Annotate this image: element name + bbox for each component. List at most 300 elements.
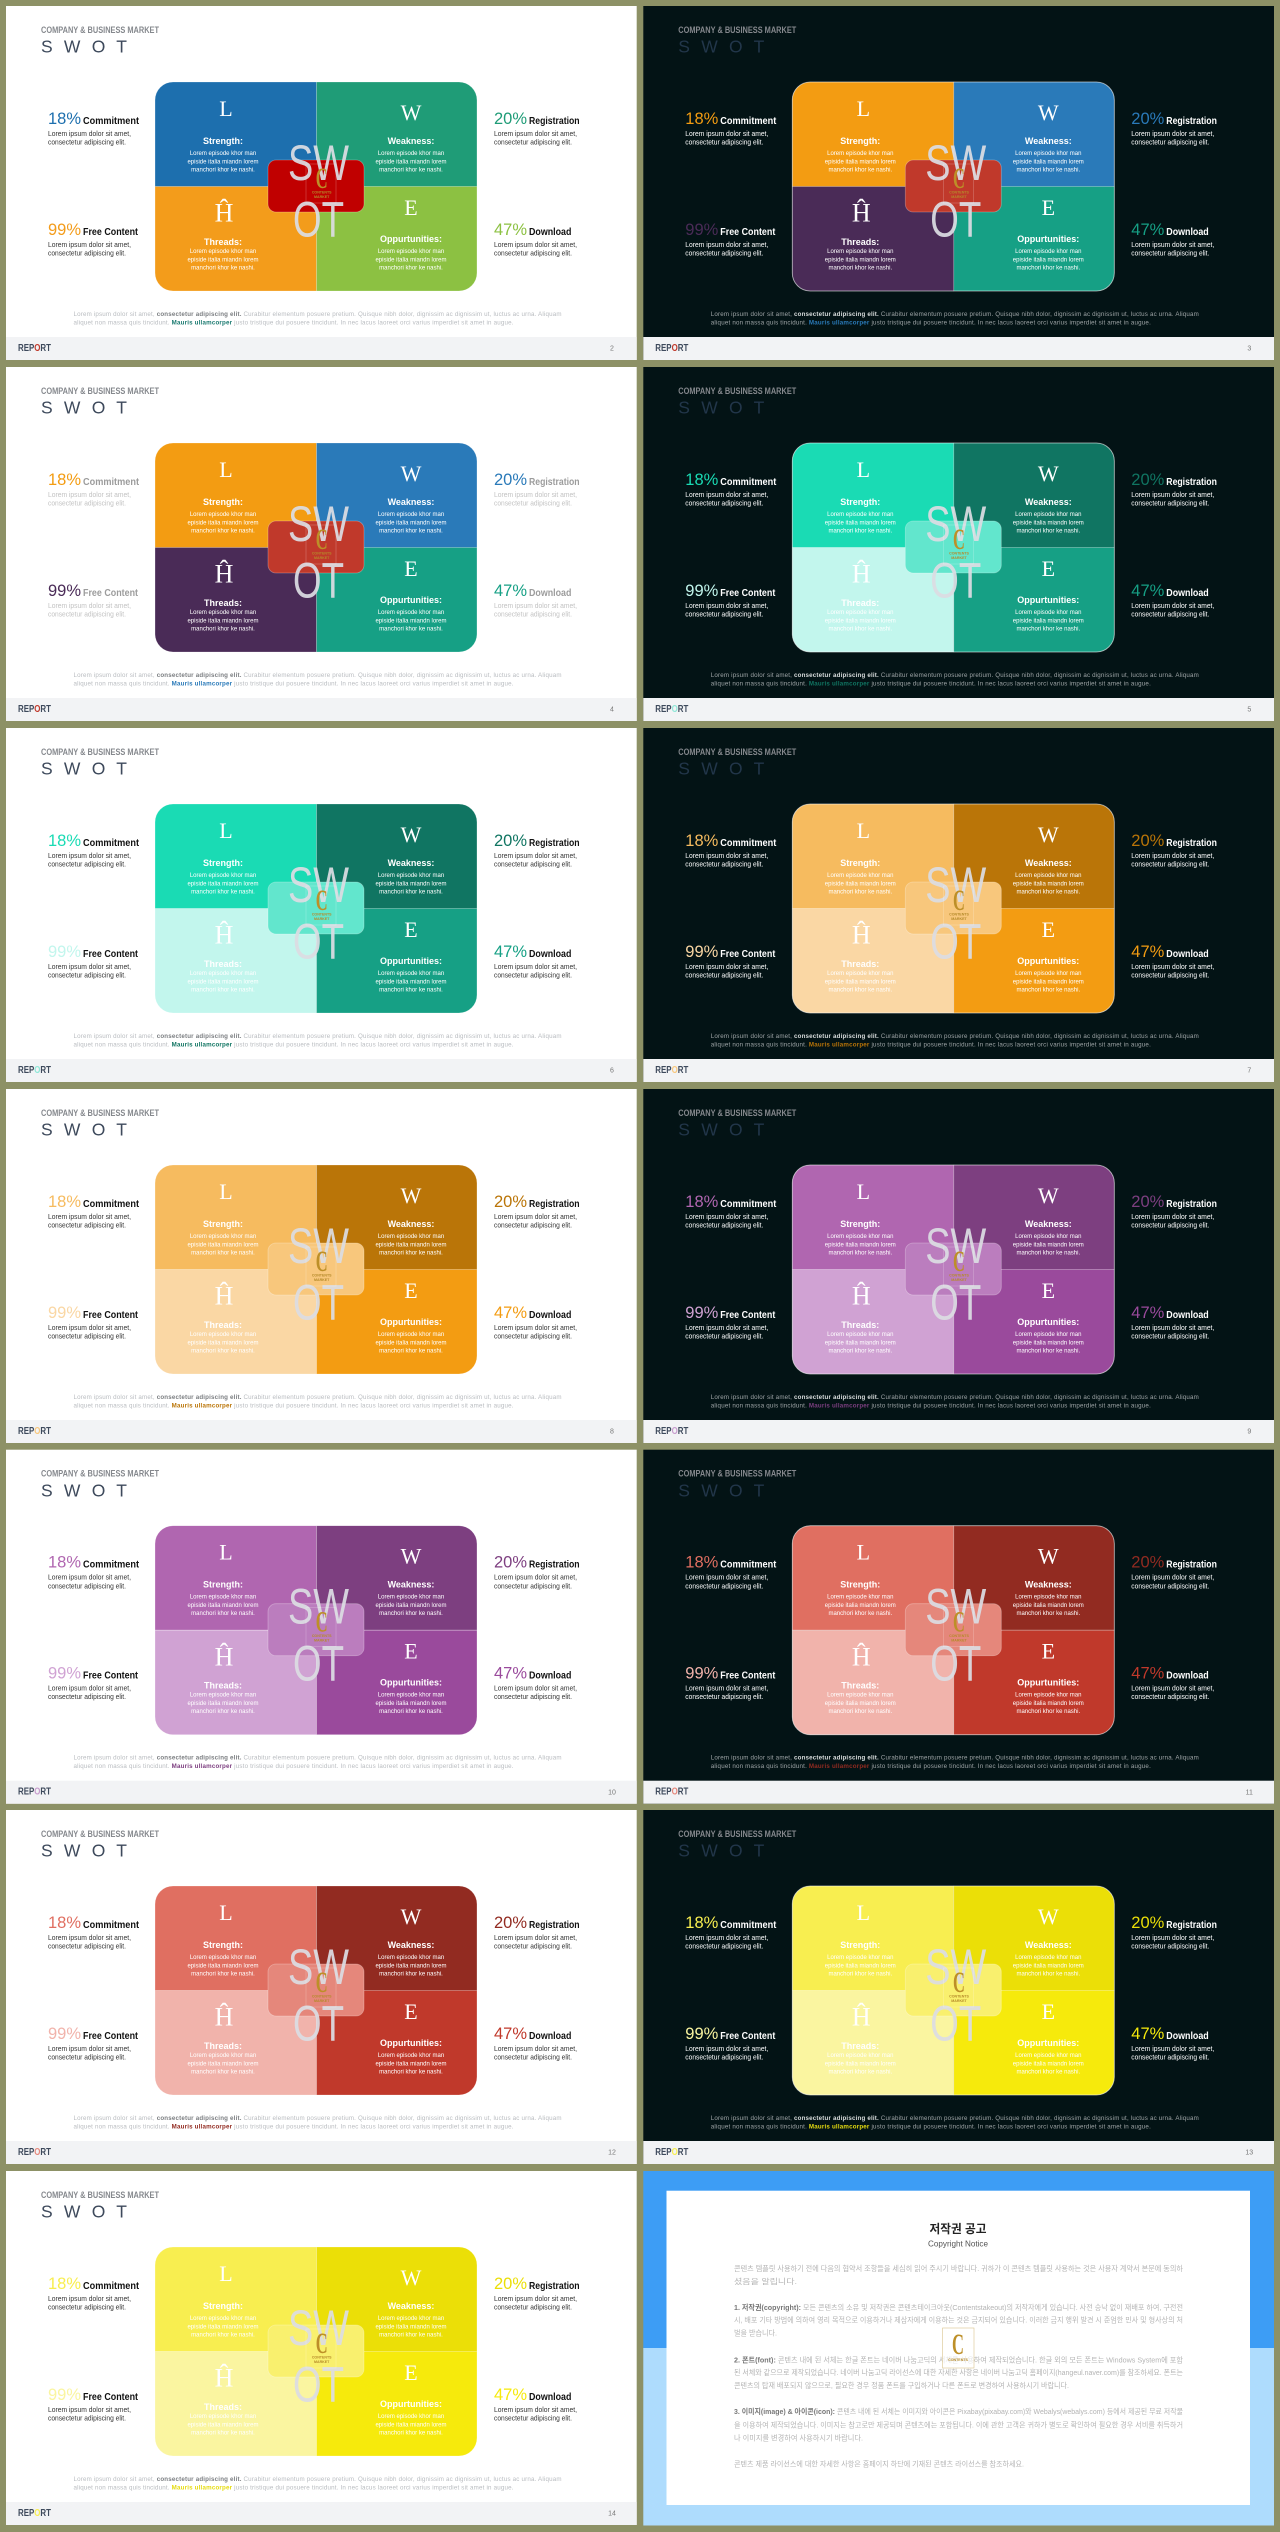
SWOT matrix: CONTENTS (312, 2356, 332, 2360)
slide 14: light SWOT yellow (6, 2171, 637, 2525)
SWOT matrix: manchori khor ke nashi. (191, 167, 255, 173)
stat: 20% Registration: consectetur adipiscing elit. (1131, 860, 1209, 869)
stat: 99% Free Content: Lorem ipsum dolor sit amet, (685, 962, 768, 971)
stat: 47% Download: Lorem ipsum dolor sit amet, (1131, 601, 1214, 610)
SWOT matrix: C (316, 1966, 328, 1999)
SWOT matrix: episide italia miandn lorem (825, 257, 896, 263)
stat: 47% Download: Download (529, 588, 571, 599)
stat: 20% Registration: 20% (494, 1914, 527, 1932)
stat: 99% Free Content: Lorem ipsum dolor sit amet, (48, 240, 131, 249)
stat: 18% Commitment (685, 471, 777, 508)
heading: COMPANY & BUSINESS MARKET (41, 2190, 159, 2200)
stat: 99% Free Content: Lorem ipsum dolor sit amet, (685, 1323, 768, 1332)
heading: S W O T (41, 398, 130, 418)
heading: S W O T (41, 1480, 130, 1500)
stat: 18% Commitment: Commitment (720, 1560, 777, 1571)
SWOT matrix: SW (288, 1218, 350, 1274)
stat: 20% Registration (1131, 471, 1217, 508)
stat: 47% Download: 47% (494, 1665, 527, 1683)
SWOT matrix: Threads: (204, 2041, 242, 2051)
SWOT matrix (155, 804, 477, 1013)
stat: 20% Registration: consectetur adipiscing elit. (494, 1942, 572, 1951)
footer bar: 10 (608, 1789, 616, 1796)
SWOT matrix: Lorem episode khor man (827, 1693, 893, 1699)
SWOT matrix: manchori khor ke nashi. (1016, 1250, 1080, 1256)
slide 8: light SWOT amber (6, 1089, 637, 1443)
stat: 99% Free Content: Free Content (720, 1310, 776, 1321)
SWOT matrix: C (316, 2327, 328, 2360)
stat: 99% Free Content (48, 2386, 139, 2422)
SWOT matrix: Lorem episode khor man (190, 2414, 256, 2420)
SWOT matrix: OT (930, 553, 981, 609)
stat: 20% Registration: consectetur adipiscing elit. (1131, 499, 1209, 508)
notice section 1: copyright: 벌을 받습니다. (734, 2328, 777, 2338)
stat: 99% Free Content: Free Content (83, 1671, 139, 1682)
SWOT matrix: episide italia miandn lorem (825, 159, 896, 165)
stat: 20% Registration (494, 110, 580, 147)
SWOT matrix: Ĥ (852, 1282, 871, 1311)
heading: S W O T (41, 1841, 130, 1861)
SWOT matrix: manchori khor ke nashi. (1016, 1611, 1080, 1617)
heading: COMPANY & BUSINESS MARKET (41, 1829, 159, 1839)
stat: 20% Registration (1131, 1193, 1217, 1230)
stat: 18% Commitment: 18% (48, 1193, 81, 1211)
SWOT matrix: E (1042, 917, 1055, 942)
SWOT matrix: episide italia miandn lorem (825, 520, 896, 526)
SWOT matrix (155, 1526, 477, 1735)
notice section 1: copyright (734, 2302, 1183, 2338)
SWOT matrix: CONTENTS (949, 1634, 969, 1638)
stat: 20% Registration: 20% (1131, 832, 1165, 850)
stat: 18% Commitment: 18% (48, 1914, 81, 1932)
stat: 99% Free Content: Lorem ipsum dolor sit amet, (685, 240, 768, 249)
stat: 18% Commitment (685, 1554, 777, 1590)
heading: S W O T (41, 37, 130, 57)
SWOT matrix: Oppurtunities: (1017, 1678, 1079, 1688)
SWOT matrix: episide italia miandn lorem (825, 1603, 896, 1609)
SWOT matrix: Weakness: (388, 1940, 434, 1950)
stat: 99% Free Content: consectetur adipiscing elit. (685, 1692, 763, 1701)
SWOT matrix: Oppurtunities: (380, 2399, 442, 2409)
SWOT matrix: Ĥ (852, 1642, 871, 1671)
SWOT matrix: episide italia miandn lorem (187, 979, 259, 985)
SWOT matrix: manchori khor ke nashi. (828, 626, 892, 632)
SWOT matrix: episide italia miandn lorem (825, 1701, 896, 1707)
SWOT matrix: episide italia miandn lorem (375, 881, 447, 887)
stat: 18% Commitment: consectetur adipiscing elit. (48, 138, 126, 147)
slide 4: light SWOT orange blue purple teal, muted labels (6, 367, 637, 721)
footer bar: REPORT (18, 1426, 51, 1437)
SWOT matrix: manchori khor ke nashi. (191, 987, 255, 993)
stat: 18% Commitment: 18% (685, 832, 719, 850)
SWOT matrix: Lorem episode khor man (1015, 971, 1081, 977)
stat: 99% Free Content: consectetur adipiscing elit. (685, 970, 763, 980)
SWOT matrix: W (401, 1183, 422, 1208)
SWOT matrix: manchori khor ke nashi. (379, 1348, 443, 1354)
stat: 47% Download (1131, 1665, 1214, 1701)
SWOT matrix: L (219, 1900, 233, 1925)
SWOT matrix: Lorem episode khor man (190, 1693, 256, 1699)
stat: 47% Download: consectetur adipiscing elit. (494, 1332, 572, 1340)
stat: 18% Commitment: consectetur adipiscing elit. (48, 860, 126, 869)
SWOT matrix: manchori khor ke nashi. (1016, 626, 1080, 632)
footnote: aliquet non massa quis tincidunt. Mauris ullamcorper justo tristique dui posuere tincidunt. In nec lacus laoreet orci varius imperdiet sit amet in augue. (711, 1763, 1151, 1770)
SWOT matrix: Lorem episode khor man (827, 249, 893, 255)
footer bar (6, 1420, 637, 1443)
SWOT matrix: manchori khor ke nashi. (1016, 1348, 1080, 1354)
SWOT matrix: SW (925, 135, 987, 191)
footer bar: 12 (608, 2150, 616, 2157)
SWOT matrix: W (1038, 100, 1059, 125)
footer bar: REPORT (655, 1426, 688, 1437)
stat: 47% Download: Download (1166, 1671, 1209, 1682)
stat: 47% Download (1131, 2025, 1214, 2062)
stat: 20% Registration: 20% (494, 1193, 527, 1211)
stat: 20% Registration (1131, 832, 1217, 869)
footer bar: REPORT (655, 2147, 688, 2158)
SWOT matrix: Ĥ (215, 1282, 234, 1311)
SWOT matrix: Oppurtunities: (380, 595, 442, 605)
SWOT matrix: C (953, 1606, 965, 1639)
stat: 47% Download (1131, 582, 1214, 618)
stat: 20% Registration (494, 1554, 580, 1590)
footer bar (6, 1781, 637, 1804)
footer bar (643, 1420, 1274, 1443)
stat: 47% Download: 47% (494, 2025, 527, 2043)
stat: 20% Registration (1131, 1554, 1217, 1590)
stat: 47% Download: Download (529, 2392, 571, 2403)
stat: 99% Free Content: Free Content (720, 1671, 776, 1682)
notice section 1: copyright: 1. 저작권(copyright): 모든 콘텐츠의 소유 및 저작권은 콘텐츠테이크아웃(Contentstakeout)의 저작자에게 있습니다. 사전 승낙 없이 재배포 하여, 구전전 (734, 2302, 1183, 2312)
stat: 99% Free Content: Lorem ipsum dolor sit amet, (48, 2405, 131, 2414)
stat: 99% Free Content: consectetur adipiscing elit. (685, 1332, 763, 1340)
SWOT matrix: Weakness: (1025, 497, 1072, 507)
SWOT matrix: manchori khor ke nashi. (828, 167, 892, 173)
stat: 47% Download: consectetur adipiscing elit. (1131, 248, 1209, 258)
heading: S W O T (678, 398, 767, 418)
SWOT matrix: manchori khor ke nashi. (379, 1611, 443, 1617)
SWOT matrix: manchori khor ke nashi. (191, 2069, 255, 2075)
stat: 47% Download: Download (529, 1310, 571, 1321)
stat: 47% Download: consectetur adipiscing elit. (494, 2414, 572, 2422)
footer bar: REPORT (18, 704, 51, 715)
stat: 18% Commitment: consectetur adipiscing elit. (685, 1581, 763, 1590)
stat: 18% Commitment: consectetur adipiscing elit. (48, 499, 126, 508)
stat: 18% Commitment: 18% (685, 471, 719, 489)
stat: 99% Free Content: 99% (48, 1304, 81, 1322)
stat: 47% Download: consectetur adipiscing elit. (494, 970, 572, 980)
SWOT matrix: Oppurtunities: (380, 2038, 442, 2048)
slide 13: dark SWOT yellow (643, 1810, 1274, 2164)
notice section 3: image and icon: 3. 이미지(image) & 아이콘(icon): 콘텐츠 내에 된 서체는 이미지와 아이콘은 Pixabay(pixabay.com)와 Webalys(webalys.com) 등에서 제공된 무료 저작물 (734, 2406, 1183, 2416)
SWOT matrix: Lorem episode khor man (827, 512, 893, 518)
SWOT matrix: Lorem episode khor man (1015, 1595, 1081, 1601)
footnote: Lorem ipsum dolor sit amet, consectetur adipiscing elit. Curabitur elementum posuere pretium. Quisque nibh dolor, dignissim ac dignissim ut, luctus ac urna. Aliquam (711, 1033, 1199, 1040)
stat: 47% Download: Download (1166, 588, 1209, 599)
SWOT matrix: Threads: (841, 237, 879, 247)
SWOT matrix: manchori khor ke nashi. (828, 1611, 892, 1617)
stat: 99% Free Content: Lorem ipsum dolor sit amet, (48, 962, 131, 971)
footnote: aliquet non massa quis tincidunt. Mauris ullamcorper justo tristique dui posuere tincidunt. In nec lacus laoreet orci varius imperdiet sit amet in augue. (74, 2123, 514, 2130)
SWOT matrix: SW (288, 135, 350, 191)
heading: COMPANY & BUSINESS MARKET (678, 25, 797, 35)
stat: 47% Download (494, 2386, 577, 2422)
SWOT matrix: Oppurtunities: (380, 956, 442, 966)
stat: 47% Download: 47% (494, 1304, 527, 1322)
stat: 47% Download: Lorem ipsum dolor sit amet, (1131, 1323, 1214, 1332)
heading: COMPANY & BUSINESS MARKET (678, 747, 797, 757)
stat: 18% Commitment: 18% (48, 2275, 81, 2293)
SWOT matrix: SW (925, 496, 987, 552)
stat: 47% Download: Lorem ipsum dolor sit amet, (1131, 962, 1214, 971)
SWOT matrix: OT (930, 1996, 981, 2052)
SWOT matrix: episide italia miandn lorem (187, 1603, 259, 1609)
notice subtitle: Copyright Notice (928, 2239, 988, 2249)
SWOT matrix: manchori khor ke nashi. (379, 1971, 443, 1977)
stat: 18% Commitment: Commitment (83, 116, 140, 127)
stat: 99% Free Content: consectetur adipiscing elit. (685, 248, 763, 258)
stat: 18% Commitment: 18% (685, 1554, 719, 1572)
SWOT matrix: Threads: (841, 598, 879, 608)
SWOT matrix: Lorem episode khor man (378, 1332, 444, 1338)
SWOT matrix: Lorem episode khor man (827, 610, 893, 616)
SWOT matrix: Threads: (841, 2041, 879, 2051)
SWOT matrix: Lorem episode khor man (190, 1955, 256, 1961)
SWOT matrix: manchori khor ke nashi. (379, 528, 443, 534)
SWOT matrix: E (404, 1999, 418, 2024)
SWOT matrix: W (401, 1904, 422, 1929)
stat: 47% Download: 47% (1131, 221, 1165, 239)
SWOT matrix: Lorem episode khor man (190, 1332, 256, 1338)
SWOT matrix: L (219, 96, 233, 121)
SWOT matrix: Lorem episode khor man (378, 873, 444, 879)
SWOT matrix: OT (930, 192, 981, 248)
stat: 47% Download: Lorem ipsum dolor sit amet, (494, 1684, 577, 1693)
SWOT matrix: Strength: (203, 136, 243, 146)
stat: 47% Download (1131, 943, 1214, 980)
stat: 99% Free Content: 99% (685, 221, 719, 239)
stat: 18% Commitment: Commitment (83, 1920, 140, 1931)
SWOT matrix: episide italia miandn lorem (1013, 2061, 1084, 2067)
footnote: aliquet non massa quis tincidunt. Mauris ullamcorper justo tristique dui posuere tincidunt. In nec lacus laoreet orci varius imperdiet sit amet in augue. (74, 1402, 514, 1409)
SWOT matrix: episide italia miandn lorem (187, 159, 259, 165)
SWOT matrix: Strength: (840, 1940, 880, 1950)
stat: 99% Free Content (685, 943, 776, 980)
SWOT matrix: episide italia miandn lorem (825, 881, 896, 887)
stat: 18% Commitment: 18% (48, 832, 81, 850)
stat: 99% Free Content: 99% (48, 2025, 81, 2043)
stat: 99% Free Content: consectetur adipiscing elit. (48, 2052, 126, 2062)
SWOT matrix: E (1042, 1278, 1055, 1303)
SWOT matrix: Weakness: (388, 1580, 434, 1590)
footer bar (6, 698, 637, 721)
stat: 99% Free Content (48, 2025, 139, 2062)
stat: 47% Download: consectetur adipiscing elit. (1131, 970, 1209, 980)
SWOT matrix: episide italia miandn lorem (375, 520, 447, 526)
stat: 99% Free Content: Lorem ipsum dolor sit amet, (685, 1684, 768, 1693)
SWOT matrix: Weakness: (388, 858, 434, 868)
SWOT matrix: Ĥ (852, 2003, 871, 2032)
stat: 18% Commitment: Commitment (83, 1560, 140, 1571)
heading (678, 1108, 797, 1140)
SWOT matrix: episide italia miandn lorem (187, 257, 259, 263)
stat: 18% Commitment: Commitment (720, 838, 777, 849)
stat: 18% Commitment: Commitment (720, 477, 777, 488)
SWOT matrix: Oppurtunities: (1017, 1317, 1079, 1327)
stat: 20% Registration: Lorem ipsum dolor sit amet, (494, 129, 577, 138)
stat: 47% Download (494, 2025, 577, 2062)
footer bar: 5 (1247, 707, 1251, 714)
heading (41, 2190, 159, 2222)
stat: 20% Registration: 20% (1131, 110, 1165, 128)
SWOT matrix: episide italia miandn lorem (1013, 520, 1084, 526)
SWOT matrix: Lorem episode khor man (827, 1595, 893, 1601)
SWOT matrix: MARKET (314, 1639, 330, 1643)
stat: 99% Free Content (685, 1665, 776, 1701)
SWOT matrix: manchori khor ke nashi. (379, 987, 443, 993)
SWOT matrix: episide italia miandn lorem (1013, 159, 1084, 165)
SWOT matrix: episide italia miandn lorem (825, 2061, 896, 2067)
SWOT matrix: manchori khor ke nashi. (828, 265, 892, 271)
SWOT matrix: episide italia miandn lorem (187, 1242, 259, 1248)
stat: 99% Free Content: Free Content (720, 949, 776, 960)
footnote: Lorem ipsum dolor sit amet, consectetur adipiscing elit. Curabitur elementum posuere pretium. Quisque nibh dolor, dignissim ac dignissim ut, luctus ac urna. Aliquam (711, 1755, 1199, 1762)
slide 7: dark SWOT amber (643, 728, 1274, 1082)
footer bar (643, 2141, 1274, 2164)
stat: 20% Registration: 20% (494, 832, 527, 850)
SWOT matrix: manchori khor ke nashi. (1016, 167, 1080, 173)
footer bar: REPORT (18, 2508, 51, 2519)
SWOT matrix: W (1038, 1544, 1059, 1569)
SWOT matrix: L (219, 818, 233, 843)
SWOT matrix: Lorem episode khor man (1015, 873, 1081, 879)
SWOT matrix: Weakness: (388, 497, 434, 507)
SWOT matrix (155, 2247, 477, 2456)
footnote: Lorem ipsum dolor sit amet, consectetur adipiscing elit. Curabitur elementum posuere pretium. Quisque nibh dolor, dignissim ac dignissim ut, luctus ac urna. Aliquam (74, 311, 561, 318)
footnote: Lorem ipsum dolor sit amet, consectetur adipiscing elit. Curabitur elementum posuere pretium. Quisque nibh dolor, dignissim ac dignissim ut, luctus ac urna. Aliquam (711, 311, 1199, 318)
slide 11: dark SWOT red (643, 1450, 1274, 1804)
SWOT matrix: manchori khor ke nashi. (1016, 265, 1080, 271)
SWOT matrix (792, 1165, 1114, 1374)
SWOT matrix: C (316, 162, 328, 195)
notice section 3: image and icon: 나 이미지를 변경하여 사용하시기 바랍니다. (734, 2432, 863, 2442)
stat: 99% Free Content (48, 1665, 139, 1701)
stat: 99% Free Content: 99% (685, 2025, 719, 2043)
SWOT matrix: Threads: (204, 2402, 242, 2412)
footnote: aliquet non massa quis tincidunt. Mauris ullamcorper justo tristique dui posuere tincidunt. In nec lacus laoreet orci varius imperdiet sit amet in augue. (74, 2484, 514, 2491)
stat: 18% Commitment: Lorem ipsum dolor sit amet, (685, 490, 768, 499)
SWOT matrix: Oppurtunities: (380, 1317, 442, 1327)
stat: 20% Registration: consectetur adipiscing elit. (494, 1581, 572, 1590)
stat: 18% Commitment: 18% (48, 1554, 81, 1572)
SWOT matrix: L (857, 1900, 870, 1925)
SWOT matrix: Threads: (204, 237, 242, 247)
stat: 47% Download: Download (529, 2031, 571, 2042)
SWOT matrix: Weakness: (388, 136, 434, 146)
SWOT matrix: Threads: (204, 1320, 242, 1330)
SWOT matrix: Lorem episode khor man (190, 1595, 256, 1601)
notice title: 저작권 공고 (930, 2221, 986, 2236)
stat: 47% Download: 47% (494, 2386, 527, 2404)
SWOT matrix (155, 1886, 477, 2095)
stat: 99% Free Content (685, 2025, 776, 2062)
stat: 20% Registration: consectetur adipiscing elit. (494, 499, 572, 508)
slide 12: light SWOT red (6, 1810, 637, 2164)
notice intro: 콘텐츠 템플릿 사용하기 전에 다음의 협약서 조항들을 세심히 읽어 주시기 바랍니다. 귀하가 이 콘텐츠 템플릿 사용하는 것은 사용자 계약서 본문에 동의하 (734, 2263, 1183, 2273)
heading: S W O T (678, 1841, 767, 1861)
SWOT matrix: C (316, 1606, 328, 1639)
notice section 3: image and icon: 을 이용하여 제작되었습니다. 이미지는 참고로만 제공되며 콘텐츠에는 포함됩니다. 이에 관한 고객은 귀하가 별도로 확인하여 필요한 경우 서비를 취득하거 (734, 2419, 1183, 2429)
stat: 18% Commitment: Commitment (720, 116, 777, 127)
SWOT matrix: MARKET (314, 2360, 330, 2364)
heading (678, 386, 797, 418)
stat: 99% Free Content: 99% (48, 582, 81, 600)
stat: 47% Download: consectetur adipiscing elit. (494, 2052, 572, 2062)
SWOT matrix: episide italia miandn lorem (375, 2061, 447, 2067)
stat: 47% Download: 47% (494, 221, 527, 239)
SWOT matrix: L (219, 457, 233, 482)
footer bar: 9 (1247, 1429, 1251, 1436)
stat: 99% Free Content: Lorem ipsum dolor sit amet, (48, 601, 131, 610)
stat: 20% Registration (494, 1193, 580, 1230)
SWOT matrix: CONTENTS (949, 552, 969, 556)
stat: 18% Commitment: Lorem ipsum dolor sit amet, (48, 490, 131, 499)
stat: 99% Free Content: 99% (685, 1665, 719, 1683)
SWOT matrix: L (219, 2261, 233, 2286)
stat: 20% Registration: Lorem ipsum dolor sit amet, (1131, 1573, 1214, 1582)
stat: 99% Free Content: Free Content (83, 949, 139, 960)
stat: 18% Commitment (48, 471, 140, 508)
stat: 47% Download: Download (529, 1671, 571, 1682)
SWOT matrix: E (404, 917, 418, 942)
footnote: aliquet non massa quis tincidunt. Mauris ullamcorper justo tristique dui posuere tincidunt. In nec lacus laoreet orci varius imperdiet sit amet in augue. (711, 1041, 1151, 1048)
stat: 47% Download: Lorem ipsum dolor sit amet, (494, 2405, 577, 2414)
heading: COMPANY & BUSINESS MARKET (678, 1829, 797, 1839)
stat: 99% Free Content: consectetur adipiscing elit. (48, 610, 126, 618)
SWOT matrix: Weakness: (1025, 858, 1072, 868)
heading (41, 1469, 159, 1500)
SWOT matrix: manchori khor ke nashi. (191, 1611, 255, 1617)
heading (41, 747, 159, 779)
footer bar: 6 (610, 1068, 614, 1075)
stat: 20% Registration: 20% (1131, 1914, 1165, 1932)
logo watermark: C (952, 2328, 964, 2361)
SWOT matrix: Strength: (840, 1580, 880, 1590)
SWOT matrix: episide italia miandn lorem (375, 618, 447, 624)
stat: 18% Commitment: Lorem ipsum dolor sit amet, (48, 1573, 131, 1582)
stat: 99% Free Content (48, 582, 139, 618)
heading: COMPANY & BUSINESS MARKET (41, 747, 159, 757)
heading (41, 25, 159, 57)
SWOT matrix: manchori khor ke nashi. (191, 1348, 255, 1354)
SWOT matrix: manchori khor ke nashi. (1016, 987, 1080, 993)
SWOT matrix: CONTENTS (949, 912, 969, 916)
stat: 18% Commitment (48, 2275, 140, 2312)
stat: 99% Free Content: 99% (685, 582, 719, 600)
footer bar: REPORT (18, 343, 51, 354)
SWOT matrix: W (1038, 1183, 1059, 1208)
footnote: Lorem ipsum dolor sit amet, consectetur adipiscing elit. Curabitur elementum posuere pretium. Quisque nibh dolor, dignissim ac dignissim ut, luctus ac urna. Aliquam (711, 2115, 1199, 2122)
SWOT matrix: Lorem episode khor man (1015, 1234, 1081, 1240)
notice intro (734, 2263, 1183, 2286)
stat: 18% Commitment (685, 1193, 777, 1230)
SWOT matrix: Lorem episode khor man (1015, 1332, 1081, 1338)
SWOT matrix: OT (293, 2357, 344, 2413)
stat: 18% Commitment: Lorem ipsum dolor sit amet, (685, 1933, 768, 1942)
SWOT matrix: episide italia miandn lorem (375, 2422, 447, 2428)
stat: 18% Commitment: Commitment (720, 1199, 777, 1210)
stat: 20% Registration (494, 832, 580, 869)
